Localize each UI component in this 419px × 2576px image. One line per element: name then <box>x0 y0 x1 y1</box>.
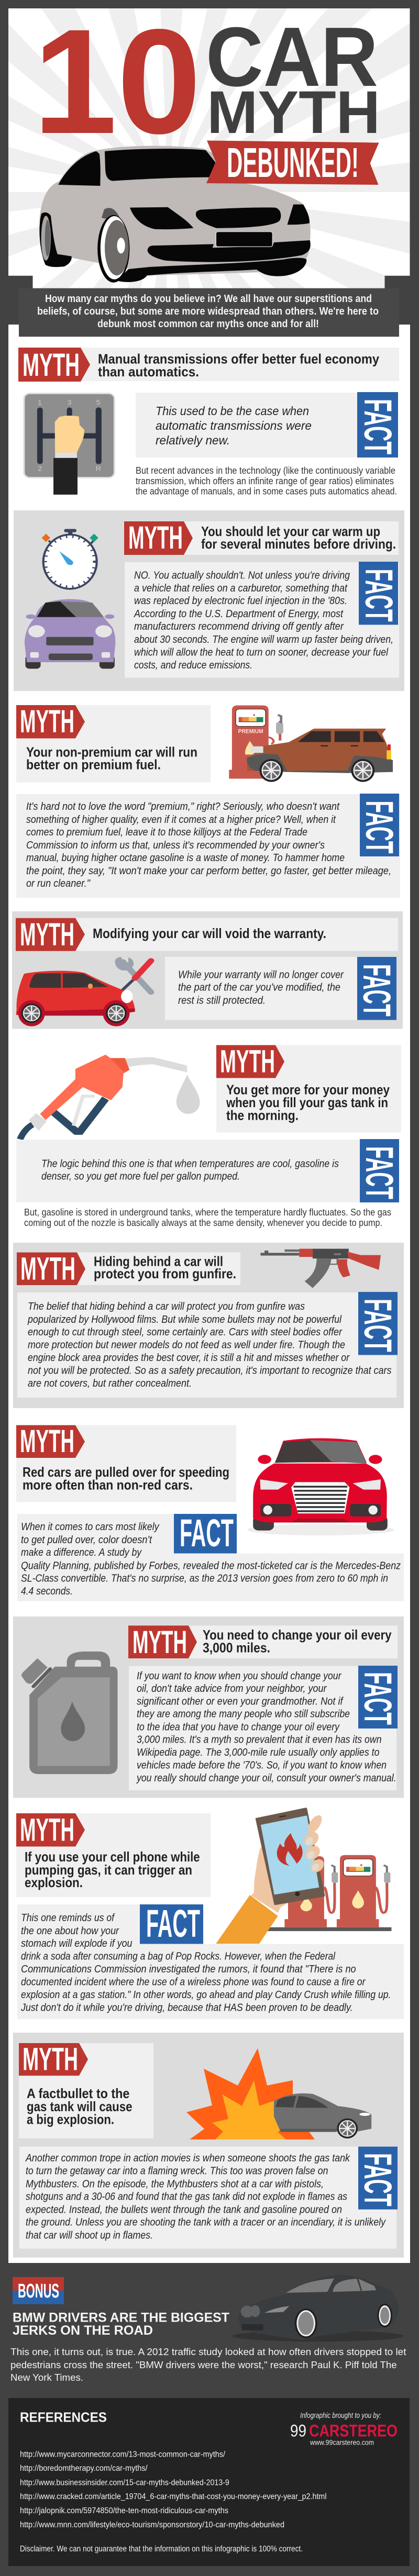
fact box: 3,000 miles. It's a myth so prevalent that it even has its own <box>137 1734 382 1746</box>
fact box: the part of the car you've modified, the <box>178 981 340 994</box>
bonus text: pedestrians cross the street. "BMW drivers were the worst," research Paul K. Piff told The <box>10 2359 397 2370</box>
fact box: The belief that hiding behind a car will protect you from gunfire was <box>28 1300 305 1312</box>
header sunburst background <box>8 8 410 288</box>
reference links: http://www.mnn.com/lifestyle/eco-tourism/sponsorstory/10-car-myths-debunked <box>20 2521 284 2529</box>
panel: myth 6 gunfire <box>13 1243 404 1408</box>
icon: assault rifle <box>260 1249 381 1288</box>
fact box: FACT <box>356 2153 400 2206</box>
icon: hand holding phone by fuel pumps <box>216 1809 391 1944</box>
intro text panel <box>19 288 399 337</box>
panel: myth 9 cell phone <box>16 1809 404 2019</box>
myth banner <box>17 1251 240 1287</box>
bonus text <box>10 2346 406 2383</box>
sponsor logo: CARSTEREO <box>309 2421 398 2440</box>
icon: red sedan front view <box>247 1438 394 1535</box>
title: 10 car myth debunked <box>33 0 380 165</box>
fact box: NO. You actually shouldn't. Not unless you're driving <box>134 570 350 582</box>
fact box: The logic behind this one is that when temperatures are cool, gasoline is <box>41 1157 339 1169</box>
fact box: Commission to inform us that, unless it's recommended by your owner's <box>26 839 325 851</box>
myth banner: better on premium fuel. <box>26 757 161 773</box>
intro text panel: How many car myths do you believe in? We all have our superstitions and <box>45 293 372 305</box>
white content sheet <box>8 325 410 2263</box>
bonus tag <box>13 2277 64 2304</box>
fact box: Another common trope in action movies is when someone shoots the gas tank <box>25 2152 351 2164</box>
fact box: to get pulled over, color doesn't <box>21 1534 152 1546</box>
myth banner: when you fill your gas tank in <box>226 1095 388 1110</box>
fact box: FACT <box>357 569 401 622</box>
intro text panel: beliefs, of course, but some are more widespread than others. We're here to <box>37 306 379 317</box>
reference links: http://jalopnik.com/5974850/the-ten-most-ridiculous-car-myths <box>20 2506 228 2515</box>
myth banner: for several minutes before driving. <box>201 536 396 552</box>
fact box: the one about how your <box>21 1925 119 1937</box>
myth banner: MYTH <box>220 1044 275 1079</box>
fact box: FACT <box>356 1299 400 1352</box>
myth banner: MYTH <box>20 1251 75 1287</box>
fact box: engine block area provides the best cover, it is still a hit and misses whether or <box>28 1352 350 1364</box>
explanation text: transmission, which offers an infinite range of gear ratios) eliminates <box>136 475 394 486</box>
icon: explosion behind grey car <box>186 2048 371 2139</box>
fact box: costs, and reduce emissions. <box>134 659 252 671</box>
fact box <box>165 957 399 1020</box>
myth banner: Hiding behind a car will <box>94 1253 223 1269</box>
references heading: REFERENCES <box>20 2410 107 2425</box>
myth banner <box>124 520 399 555</box>
myth banner: A factbullet to the <box>27 2086 129 2101</box>
sponsor logo: Infographic brought to you by: <box>300 2411 381 2420</box>
fact box <box>16 1139 401 1202</box>
icon: stopwatch <box>42 529 98 589</box>
disclaimer: Disclaimer. We can not guarantee that the information on this infographic is 100% correct. <box>20 2545 303 2553</box>
fact box: When it comes to cars most likely <box>21 1521 160 1533</box>
fact box <box>136 392 400 458</box>
myth banner: MYTH <box>20 1423 74 1459</box>
panel: myth 8 oil change <box>13 1616 404 1798</box>
illustration: dark BMW coupe <box>233 2275 403 2341</box>
fact box: significant other or even your grandmother. Not if <box>137 1695 344 1707</box>
myth banner: You need to change your oil every <box>203 1627 392 1643</box>
fact box: rest is still protected. <box>178 994 266 1006</box>
fact box: more protection but newer models do not feed as well under fire. Though the <box>28 1339 345 1351</box>
myth banner <box>16 1423 236 1502</box>
myth banner: MYTH <box>20 704 74 739</box>
fact box: vehicles made before the '70's. So, if you want to know when <box>137 1759 387 1771</box>
bonus text: New York Times. <box>10 2372 83 2383</box>
fact box: which will allow the heat to turn on sooner, decrease your fuel <box>134 646 389 659</box>
icon: red car with wrench and screwdriver <box>16 957 151 1027</box>
fact box: was replaced by electronic fuel injection in the '80s. <box>134 595 347 607</box>
fact box: oil, don't take advice from your neighbor, your <box>137 1682 327 1694</box>
intro text panel: debunk most common car myths once and for all! <box>97 318 319 330</box>
myth banner: MYTH <box>23 347 80 383</box>
panel: myth 5 morning fill-up <box>16 1044 401 1228</box>
fact box: enough to cut through steel, some certainly are. Cars with steel bodies offer <box>28 1326 343 1338</box>
fact box: they are among the many people who still subscribe <box>137 1708 350 1720</box>
bonus tag: BONUS <box>18 2280 59 2302</box>
myth banner: MYTH <box>23 2042 78 2077</box>
fact box <box>125 562 401 678</box>
fact box: drink a soda after consuming a bag of Pop Rocks. However, when the Federal <box>21 1950 336 1962</box>
myth banner <box>16 1812 211 1897</box>
panel: references <box>8 2398 410 2566</box>
icon: fuel pump and brown SUV: PREMIUM <box>238 728 263 734</box>
fact box: that car will shoot up in flames. <box>26 2229 153 2242</box>
fact box: make a difference. A study by <box>21 1546 142 1558</box>
myth banner <box>19 2042 153 2138</box>
title word MYTH: MYTH <box>207 79 380 146</box>
fact box: a vehicle that relies on a carburetor, something that <box>134 582 348 594</box>
fact box: popularized by Hollywood films. But while some bullets may not be powerful <box>27 1313 342 1325</box>
fact box: 4.4 seconds. <box>21 1585 73 1597</box>
icon: hand on gear shifter: 1 <box>38 399 42 406</box>
reference links: http://www.businessinsider.com/15-car-myths-debunked-2013-9 <box>20 2478 229 2487</box>
myth banner: the morning. <box>226 1108 299 1123</box>
icon: hand on gear shifter: 3 <box>68 399 72 406</box>
panel: myth 3 premium fuel <box>16 704 401 898</box>
fact box <box>19 2147 400 2249</box>
icon: purple car front <box>25 599 115 668</box>
explanation text <box>136 465 397 496</box>
fact box: or run cleaner." <box>26 877 91 889</box>
fact box: comes to premium fuel, leave it to those killjoys at the Federal Trade <box>26 826 307 838</box>
fact box: automatic transmissions were <box>156 419 312 432</box>
fact box: manual, buying higher octane gasoline is a waste of money. To hammer home <box>26 852 345 864</box>
fact box <box>16 794 401 898</box>
sponsor logo: www.99carstereo.com <box>310 2438 374 2447</box>
bonus heading <box>13 2311 229 2338</box>
sponsor logo <box>290 2411 398 2447</box>
myth banner: You should let your car warm up <box>201 523 380 539</box>
fact box: Wikipedia page. The 3,000-mile rule usually only applies to <box>137 1746 379 1758</box>
myth banner: MYTH <box>133 1624 187 1660</box>
fact box: FACT <box>356 1672 400 1725</box>
icon: oil can <box>21 1652 117 1774</box>
fact box: FACT <box>356 399 400 454</box>
fact box: FACT <box>355 964 399 1017</box>
fact box: to the idea that you have to change your oil every <box>137 1721 340 1733</box>
fact box <box>17 1902 404 2019</box>
icon: hand on gear shifter: 2 <box>38 465 42 472</box>
fact box <box>17 1511 404 1601</box>
reference links: http://www.mycarconnector.com/13-most-common-car-myths/ <box>20 2450 226 2459</box>
icon: hand on gear shifter <box>24 394 114 495</box>
icon: hand on gear shifter: 5 <box>96 399 101 406</box>
myth banner: explosion. <box>25 1875 83 1890</box>
bonus heading: BMW DRIVERS ARE THE BIGGEST <box>13 2311 229 2325</box>
icon: fuel nozzle with drop <box>20 1055 200 1139</box>
title number 10: 10 <box>33 0 201 165</box>
myth banner: If you use your cell phone while <box>25 1849 200 1865</box>
myth banner: 3,000 miles. <box>203 1640 270 1656</box>
myth banner: Red cars are pulled over for speeding <box>23 1464 229 1480</box>
myth banner: Manual transmissions offer better fuel economy <box>98 351 379 366</box>
myth banner <box>128 1624 398 1660</box>
myth banner: pumping gas, it can trigger an <box>25 1862 192 1878</box>
fact box: This used to be the case when <box>156 404 309 418</box>
myth banner: MYTH <box>20 1812 74 1848</box>
icon: fuel pump and brown SUV <box>229 705 393 782</box>
myth banner: MYTH <box>128 520 183 555</box>
fact box: denser, so you get more fuel per gallon pumped. <box>41 1170 240 1183</box>
fact box: While your warranty will no longer cover <box>178 968 344 981</box>
panel: bonus bmw drivers <box>10 2275 406 2383</box>
fact box: This one reminds us of <box>21 1912 115 1924</box>
panel: myth 10 gas tank <box>13 2033 404 2258</box>
fact box: shotguns and a 30-06 and found that the gas tank did not explode in flames as <box>26 2190 347 2202</box>
myth banner: MYTH <box>20 917 74 952</box>
fact box: FACT <box>146 1902 200 1945</box>
myth banner <box>16 917 398 952</box>
bonus text: This one, it turns out, is true. A 2012 traffic study looked at how often drivers stopped to let <box>10 2346 406 2357</box>
fact box: manufacturers recommend driving off gently after <box>134 620 344 632</box>
fact box: something of higher quality, even if it comes at a higher price? Well, when it <box>26 813 336 826</box>
myth banner: a big explosion. <box>27 2112 114 2127</box>
sponsor logo: 99 <box>290 2421 306 2440</box>
myth banner: Modifying your car will void the warranty. <box>93 925 326 941</box>
myth banner <box>18 347 399 383</box>
explanation text <box>24 1207 391 1228</box>
myth banner: You get more for your money <box>226 1082 390 1098</box>
panel: myth 4 warranty <box>12 911 403 1029</box>
myth banner: protect you from gunfire. <box>94 1266 236 1281</box>
fact box: If you want to know when you should change your <box>137 1670 342 1682</box>
fact box: Mythbusters. On the episode, the Mythbusters shot at a car with pistols, <box>26 2178 324 2190</box>
fact box: Communications Commission investigated the rumors, it found that "There is no <box>21 1963 356 1975</box>
fact box: FACT <box>358 801 401 853</box>
reference links <box>20 2450 327 2529</box>
fact box: stomach will explode if you <box>21 1937 132 1949</box>
panel: myth 7 red cars <box>16 1423 404 1601</box>
fact box: Just don't do it while you're driving, because that HAS been proven to be deadly. <box>20 2002 352 2014</box>
fact box: It's hard not to love the word "premium," right? Seriously, who doesn't want <box>26 800 340 812</box>
myth banner: gas tank will cause <box>27 2099 132 2114</box>
panel: myth 2 warming up <box>14 510 404 691</box>
fact box <box>129 1666 400 1790</box>
fact box: FACT <box>180 1511 234 1555</box>
myth banner: more often than non-red cars. <box>23 1477 193 1493</box>
myth banner: Your non-premium car will run <box>26 744 197 760</box>
fact box: relatively new. <box>156 433 230 447</box>
bonus heading: JERKS ON THE ROAD <box>13 2323 153 2338</box>
myth banner: than automatics. <box>98 364 199 380</box>
fact box: expected. Instead, the bullets went through the tank and gasoline poured on <box>26 2203 342 2215</box>
illustration: silver car, front three-quarter view <box>39 146 311 283</box>
myth banner <box>216 1044 401 1133</box>
fact box: documented incident where the use of a wireless phone was found to cause a fire or <box>21 1976 366 1988</box>
fact box: According to the U.S. Department of Energy, most <box>133 608 344 620</box>
panel: myth 1 manual transmissions <box>18 347 400 496</box>
reference links: http://boredomtherapy.com/car-myths/ <box>20 2464 148 2473</box>
title word CAR: CAR <box>206 10 378 104</box>
fact box: are not covers, but rather concealment. <box>28 1377 192 1389</box>
fact box <box>17 1292 400 1398</box>
reference links: http://www.cracked.com/article_19704_6-car-myths-that-cost-you-money-every-year_p2.html <box>20 2492 327 2501</box>
icon: hand on gear shifter: R <box>96 465 101 472</box>
fact box: FACT <box>358 1146 401 1199</box>
myth banner <box>16 704 211 783</box>
fact box: to turn the getaway car into a flaming wreck. This too was proven false on <box>26 2165 328 2177</box>
